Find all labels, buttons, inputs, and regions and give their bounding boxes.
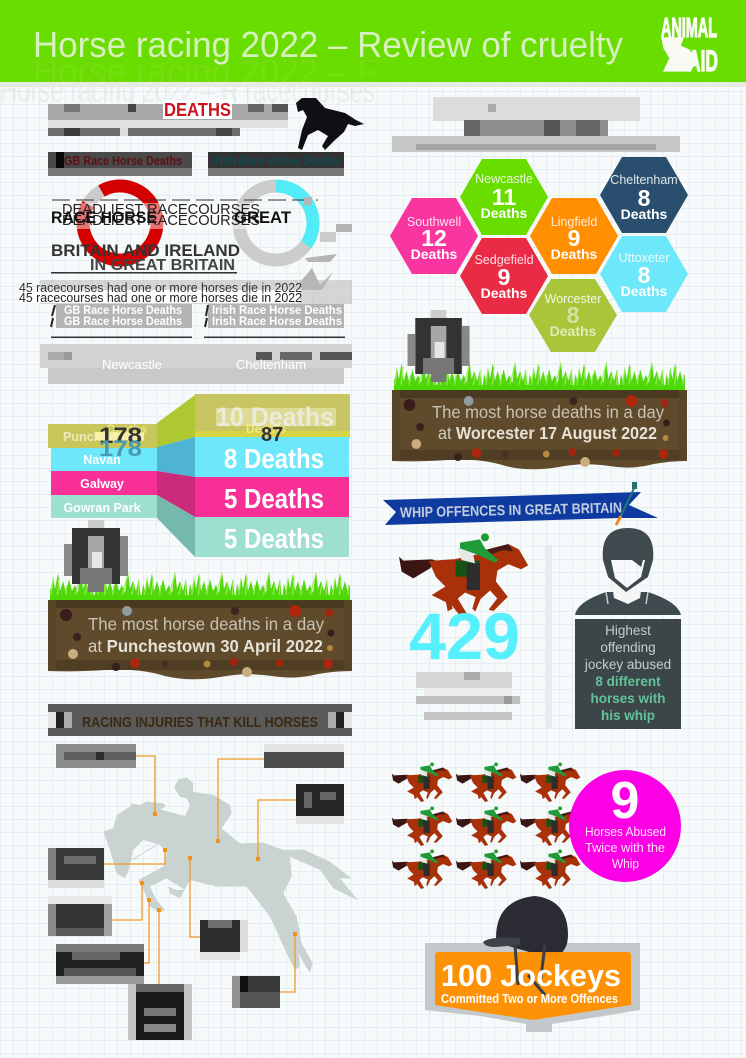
tab: GB race horse deaths (48, 152, 192, 176)
overlapping numbers: 178 (99, 436, 142, 461)
hex: Uttoxeter: Deaths (621, 283, 668, 299)
donut: GB deaths (69, 172, 171, 274)
ribbon: whip offences (383, 482, 658, 525)
connector dots (140, 812, 297, 936)
icon: black horse (296, 98, 364, 150)
overlapping numbers: 87 (261, 424, 283, 446)
hex: Worcester (529, 279, 617, 352)
panel: deadliest racecourses right heading (392, 97, 680, 152)
heading bar (48, 704, 352, 736)
ghost title (2, 60, 375, 104)
repeat labels: Irish Race Horse Deaths (212, 314, 342, 328)
hex: Lingfield: Deaths (551, 246, 598, 262)
callout: nine horses abused twice: Twice with the (585, 841, 665, 855)
hex: Lingfield (530, 198, 618, 274)
overlapping heading text: DEADLIEST RACECOURSES (62, 212, 260, 229)
overlapping heading text (51, 200, 318, 274)
row: Galway: Galway (80, 477, 124, 491)
injury label: bottom (128, 984, 192, 1040)
ribbon: whip offences: WHIP OFFENCES IN GREAT BRITAIN (400, 500, 622, 521)
row: Navan: 8 Deaths (224, 443, 324, 474)
obscured caption (416, 672, 520, 720)
panel: highest offending jockey: jockey abused (584, 657, 671, 672)
row: Galway: 5 Deaths (224, 483, 324, 514)
hex: Worcester: Worcester (545, 292, 601, 306)
logo (661, 12, 718, 78)
callout: nine horses abused twice (569, 770, 681, 882)
ghost title: Horse racing 2022 – Review of cruelty (33, 51, 623, 92)
hex: Uttoxeter: 8 (638, 262, 651, 288)
injury label: left 2 (48, 896, 112, 936)
overlapping heading text: RACE HORSE (51, 208, 157, 227)
banner shadow (425, 943, 640, 1032)
hex: Newcastle: 11 (492, 184, 516, 210)
pictogram: nine horses (392, 763, 580, 889)
icon: faint horse fragment (300, 197, 352, 290)
connector lines (104, 756, 296, 992)
hex: Cheltenham: Deaths (621, 206, 668, 222)
header banner (0, 0, 746, 110)
injury label: top right (264, 744, 344, 768)
hex: Southwell (390, 198, 478, 274)
row: Punchestown: Deaths (246, 422, 286, 436)
racecourses sentence: 45 racecourses had one or more horses die in 2022 (19, 290, 302, 305)
tab: GB race horse deaths: GB Race Horse Deaths (64, 154, 182, 168)
hexagons: deadliest racecourses (390, 157, 688, 352)
ghost title: Horse racing 2022 – R racecourses (0, 72, 375, 110)
panel: obscured Irish heading: Cheltenham (236, 357, 306, 372)
grass and soil: Worcester: at Worcester 17 August 2022 (438, 423, 657, 443)
grass and soil: Worcester (392, 310, 687, 469)
row: Navan: Navan (83, 453, 121, 467)
hex: Lingfield: 9 (568, 225, 580, 251)
hex: Southwell: 12 (421, 225, 447, 251)
statistic: 429 offences (399, 533, 527, 720)
repeat labels (51, 303, 345, 338)
icon: riding helmet (483, 896, 568, 958)
callout: 100 jockeys: 100 Jockeys (441, 958, 621, 993)
row: Punchestown (48, 394, 350, 448)
injury label: right (232, 976, 280, 1008)
hex: Cheltenham (600, 157, 688, 233)
hex: Uttoxeter: Uttoxeter (619, 251, 669, 265)
callout: nine horses abused twice: 9 (611, 772, 639, 830)
hex: Newcastle (460, 159, 548, 235)
overlapping heading text: IN GREAT BRITAIN (90, 257, 235, 274)
hex: Newcastle: Newcastle (475, 172, 533, 186)
panel: highest offending jockey: 8 different (595, 674, 661, 689)
hex: Sedgefield: 9 (498, 264, 510, 290)
icon: jockey bust (575, 528, 681, 615)
hex: Lingfield: Lingfield (551, 215, 597, 229)
injury label: centre (200, 920, 248, 960)
panel: highest offending jockey: Highest (605, 623, 651, 638)
hex: Southwell: Southwell (407, 215, 461, 229)
repeat labels: Irish Race Horse Deaths (212, 303, 342, 317)
overlapping numbers: 178 (99, 423, 142, 448)
grass and soil: Punchestown: The most horse deaths in a day (88, 614, 324, 634)
grass and soil: Punchestown (48, 520, 352, 679)
callout: 100 jockeys (425, 896, 640, 1032)
overlapping numbers (99, 423, 283, 461)
injury label: left 3 (56, 944, 144, 984)
grass and soil: Punchestown: at Punchestown 30 April 2022 (88, 636, 323, 656)
banner (435, 952, 631, 1020)
statistic: 429 offences: 429 (409, 599, 520, 673)
overlapping heading text: DEADLIEST RACECOURSES (62, 201, 260, 218)
grass and soil: Worcester: The most horse deaths in a day (432, 402, 664, 422)
funnel chart: Irish course deaths (48, 394, 350, 557)
callout: nine horses abused twice: Horses Abused (585, 825, 666, 839)
row: Gowran Park: Gowran Park (63, 501, 141, 515)
hex: Newcastle: Deaths (481, 205, 528, 221)
injury label: top left (56, 744, 136, 768)
hex: Cheltenham: 8 (638, 185, 651, 211)
row: Punchestown: 10 Deaths (216, 402, 334, 432)
panel: UK and Ireland deaths intro (19, 98, 364, 338)
divider (545, 545, 552, 728)
overlapping heading text: BRITAIN AND IRELAND (51, 241, 240, 260)
overlapping heading text: GREAT (234, 208, 292, 227)
hex: Southwell: Deaths (411, 246, 458, 262)
hex: Uttoxeter (600, 236, 688, 312)
hex: Sedgefield: Deaths (481, 285, 528, 301)
heading word: deaths: DEATHS (164, 100, 231, 120)
panel: obscured Irish heading (40, 344, 352, 384)
icon: racehorse with jockey (399, 533, 527, 617)
hex: Sedgefield: Sedgefield (474, 253, 534, 267)
injury label: upper right (296, 784, 344, 824)
row: Punchestown: Deaths (107, 422, 147, 436)
tab: Irish race horse deaths: Irish Race Horse Deaths (212, 154, 340, 168)
logo: AID (688, 45, 718, 78)
row: Gowran Park: 5 Deaths (224, 523, 324, 554)
horse and rider silhouette (103, 777, 358, 973)
hex: Cheltenham: Cheltenham (610, 173, 678, 187)
injury label: left 1 (48, 848, 104, 888)
panel: obscured Irish heading: Newcastle (102, 357, 162, 372)
panel: highest offending jockey: his whip (601, 708, 655, 723)
title: Horse racing 2022 – Review of cruelty (33, 24, 623, 65)
callout: 100 jockeys: Committed Two or More Offences (441, 992, 618, 1006)
panel: highest offending jockey: horses with (590, 691, 666, 706)
repeat labels: GB Race Horse Deaths (64, 303, 182, 317)
heading bar: RACING INJURIES THAT KILL HORSES (82, 714, 318, 731)
row: Navan (51, 437, 349, 477)
panel: highest offending jockey: offending (600, 640, 656, 655)
racecourses sentence (19, 280, 352, 305)
donut: Irish deaths (239, 186, 313, 260)
row: Galway (51, 471, 349, 517)
row: Punchestown: Punchestown (63, 430, 144, 444)
callout: nine horses abused twice: Whip (612, 857, 639, 871)
panel: injuries that kill horses (48, 704, 358, 1040)
hex: Sedgefield (460, 238, 548, 314)
hex: Worcester: Deaths (550, 323, 597, 339)
repeat labels: GB Race Horse Deaths (64, 314, 182, 328)
tab: Irish race horse deaths (208, 152, 344, 176)
racecourses sentence: 45 racecourses had one or more horses die in 2022 (19, 280, 302, 295)
panel: highest offending jockey (575, 528, 681, 729)
icon: whip (616, 482, 637, 525)
hex: Worcester: 8 (567, 302, 580, 328)
obscured intro text (48, 104, 288, 136)
row: Gowran Park (51, 495, 349, 557)
